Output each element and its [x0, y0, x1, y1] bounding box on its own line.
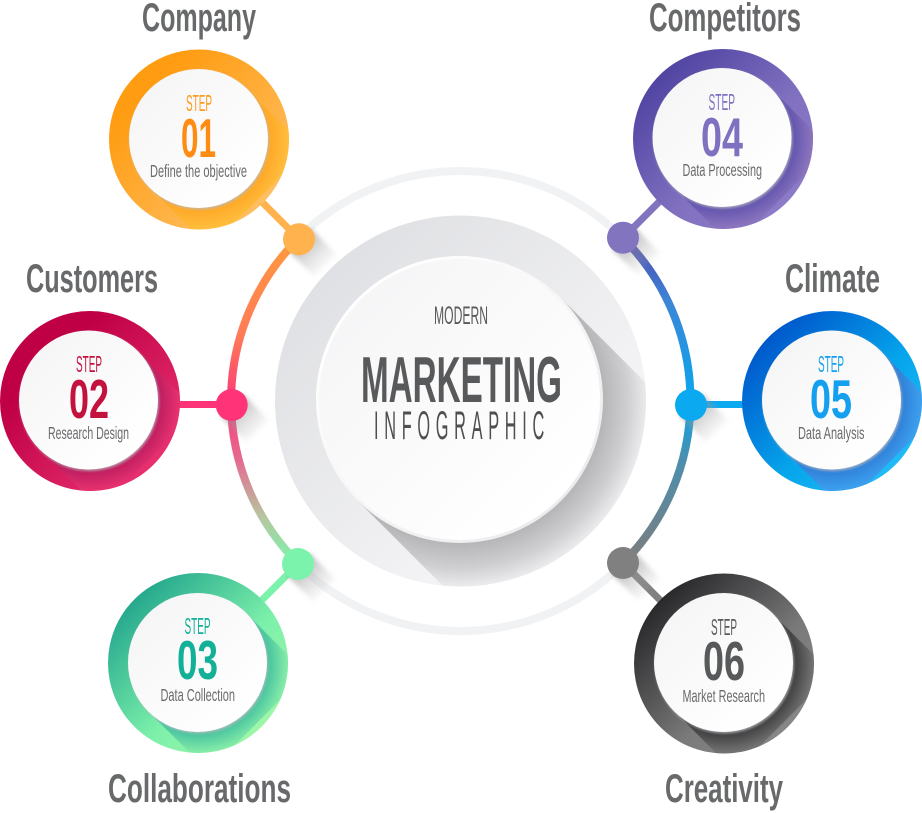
text: marketing: MARKETING [361, 343, 562, 416]
step 01 number: 01 [181, 107, 216, 169]
centre title: MODERN [434, 302, 488, 330]
outer grey ring [230, 171, 690, 631]
step 06 panel: STEP [711, 614, 737, 640]
heading: Creativity: Creativity [665, 767, 783, 811]
step 06 number: 06 [703, 630, 745, 692]
step 04 description: Data Processing [682, 160, 762, 180]
step 05 panel [742, 311, 922, 509]
step 03 description: Data Collection [160, 685, 235, 705]
node shadows [220, 227, 728, 601]
step 02 panel: STEP [76, 351, 102, 377]
step 04 panel [633, 49, 813, 229]
step 03 number: 03 [177, 629, 218, 691]
step 03 panel: STEP [184, 613, 210, 639]
step 04 panel: STEP [708, 89, 735, 115]
text: INFOGRAPHIC [374, 404, 550, 448]
heading: Collaborations: Collaborations [108, 767, 291, 811]
node 02 [216, 389, 248, 421]
centre disc: backplate with long shadow [275, 216, 646, 586]
step 02 description: Research Design [48, 423, 129, 443]
step 05 description: Data Analysis [798, 423, 865, 443]
step 03 panel [108, 573, 288, 753]
centre disc: white face [316, 256, 603, 543]
heading: Customers: Customers [26, 257, 158, 301]
coloured arc: right [623, 238, 690, 563]
step 01 panel [109, 50, 289, 230]
step 02 number: 02 [69, 368, 109, 430]
step 02 panel [0, 311, 180, 491]
centre title [361, 302, 562, 448]
step 01 description: Define the objective [150, 161, 247, 181]
node 01 [283, 223, 315, 255]
node 03 [282, 548, 314, 580]
step 05 number: 05 [810, 368, 852, 430]
step 05 panel: STEP [818, 351, 844, 377]
node 04 [607, 222, 639, 254]
step 06 panel [634, 574, 814, 754]
step 04 number: 04 [701, 106, 743, 168]
node 05 [675, 389, 707, 421]
coloured arc: left [231, 238, 299, 563]
connectors between nodes and step circles [170, 193, 752, 612]
step 01 panel: STEP [186, 90, 212, 116]
node 06 [607, 547, 639, 579]
step 06 description: Market Research [682, 686, 765, 706]
